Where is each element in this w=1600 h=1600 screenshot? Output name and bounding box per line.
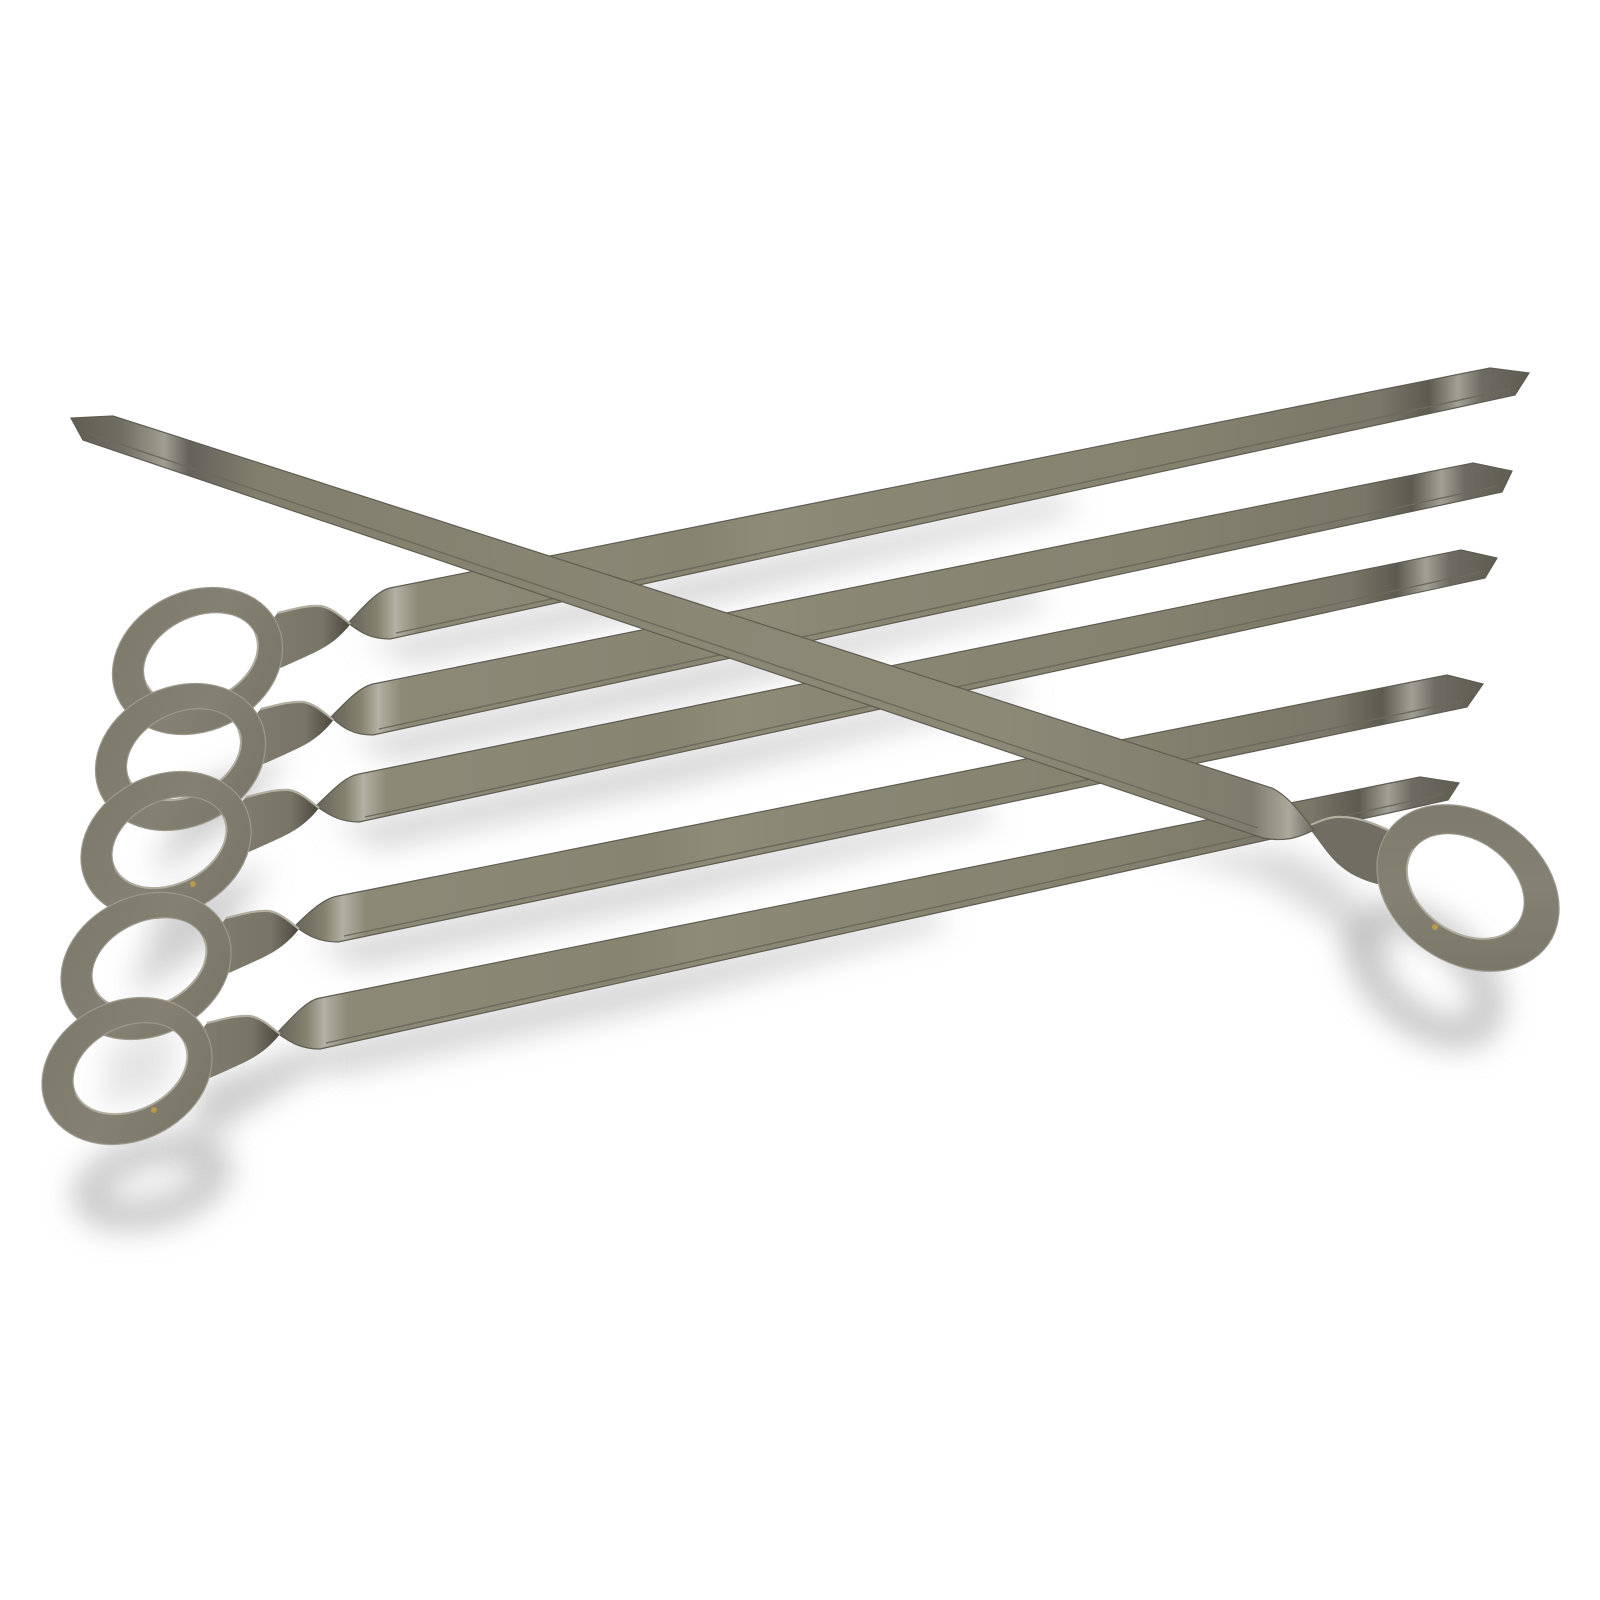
blade 4 [295, 675, 1483, 942]
ring handle 5 [18, 970, 280, 1172]
soft shadows on the surface [80, 495, 1509, 1228]
skewer 1 (back) [88, 368, 1529, 762]
skewer 4 [37, 675, 1483, 1067]
skewer 3 [57, 550, 1497, 946]
ring handle 3 [57, 744, 319, 946]
ring handle 4 [37, 865, 299, 1067]
ring handle 1 [88, 560, 351, 762]
crossing blade [71, 416, 1314, 840]
blade 3 [316, 550, 1497, 822]
blade 5 [277, 777, 1459, 1049]
crossing ring [1345, 770, 1591, 1006]
crossing neck [1308, 817, 1400, 884]
skewer 5 (front left) [18, 777, 1459, 1172]
ring handle 2 [71, 656, 334, 858]
blade 2 [331, 463, 1512, 735]
crossing skewer (on top, ring at right) [71, 416, 1591, 1006]
skewer 2 [71, 463, 1512, 858]
blade 1 [348, 368, 1529, 639]
